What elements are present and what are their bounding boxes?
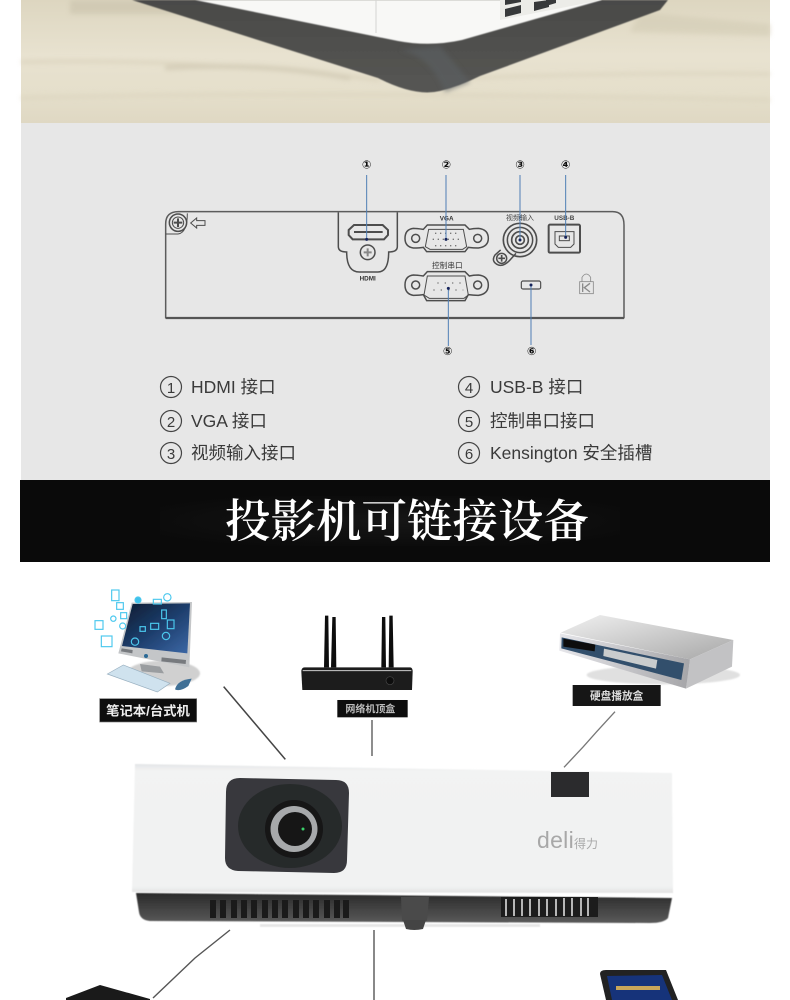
callout numbers: ① (362, 158, 371, 172)
label: 笔记本/台式机 (100, 699, 197, 722)
device: HDD player (559, 615, 740, 767)
connector line (564, 712, 615, 767)
legend item 5: 5 (465, 414, 473, 431)
device: desktop computer (95, 590, 285, 759)
diagram: projector rear ports (166, 158, 624, 358)
HDMI port: HDMI (360, 276, 376, 283)
video input port (493, 213, 537, 265)
corner screw and arrow (166, 213, 205, 234)
adjustable foot (401, 897, 429, 930)
projector base (136, 893, 672, 923)
icon: media player box (559, 615, 740, 689)
VGA port: VGA (440, 216, 454, 223)
VGA port (405, 216, 488, 252)
callout numbers (362, 158, 570, 358)
callout numbers: ④ (561, 158, 570, 172)
panel: ports background (21, 123, 770, 480)
icon: router (301, 616, 413, 690)
label: 硬盘播放盒: 硬盘播放盒 (590, 689, 644, 702)
legend item 1: 1 (167, 380, 175, 397)
left vent (210, 900, 349, 918)
leader end dots (365, 236, 567, 290)
connector line (224, 687, 285, 759)
USB-B port: USB-B (554, 215, 575, 222)
legend item 5: 控制串口接口 (490, 411, 595, 431)
Kensington lock icon (580, 274, 593, 294)
callout leader lines (367, 175, 566, 346)
heading text: 投影机可链接设备 (225, 486, 589, 551)
photo: projector corner on wooden table (21, 0, 770, 123)
control serial port: 控制串口 (432, 260, 463, 270)
Kensington slot (521, 281, 541, 289)
heading band (20, 480, 770, 562)
legend item 1: HDMI 接口 (191, 377, 276, 397)
callout numbers: ② (442, 158, 451, 172)
right vent (501, 897, 598, 917)
callout numbers: ③ (515, 158, 525, 172)
connector lines below projector (153, 930, 374, 1000)
logo: deli得力 (537, 827, 598, 853)
HDMI port (338, 212, 397, 283)
legend item 2: VGA 接口 (191, 411, 267, 431)
projector body (132, 764, 673, 893)
control serial port (405, 260, 488, 301)
legend item 6: 6 (465, 446, 473, 463)
legend item 2 (160, 410, 267, 432)
connector line (369, 720, 374, 756)
legend item 1 (160, 376, 276, 398)
label: 网络机顶盒: 网络机顶盒 (345, 702, 395, 715)
legend item 6: Kensington 安全插槽 (490, 443, 652, 463)
legend item 4: USB-B 接口 (490, 377, 583, 397)
projector shadow (260, 924, 540, 927)
label: 硬盘播放盒 (573, 685, 661, 706)
callout numbers: ⑥ (527, 344, 536, 358)
chassis bottom edge (166, 314, 624, 321)
projector: front view (132, 764, 673, 930)
legend item 3: 视频输入接口 (191, 443, 296, 463)
legend item 2: 2 (167, 414, 175, 431)
sensor window (551, 772, 589, 797)
label: 网络机顶盒 (337, 700, 408, 717)
video input port: 视频输入 (506, 213, 534, 222)
USB-B port (549, 215, 580, 253)
icon: computer (95, 590, 200, 692)
label: 笔记本/台式机: 笔记本/台式机 (106, 702, 191, 718)
legend item 4: 4 (465, 380, 473, 397)
device: network set-top box (301, 616, 413, 756)
callout numbers: ⑤ (443, 344, 452, 358)
device: tablet (cropped) (600, 970, 678, 1000)
legend item 3: 3 (167, 446, 175, 463)
chassis outline (166, 212, 624, 318)
legend: port list (160, 376, 652, 464)
device: laptop (cropped) (66, 985, 150, 1000)
lens housing (225, 778, 349, 873)
